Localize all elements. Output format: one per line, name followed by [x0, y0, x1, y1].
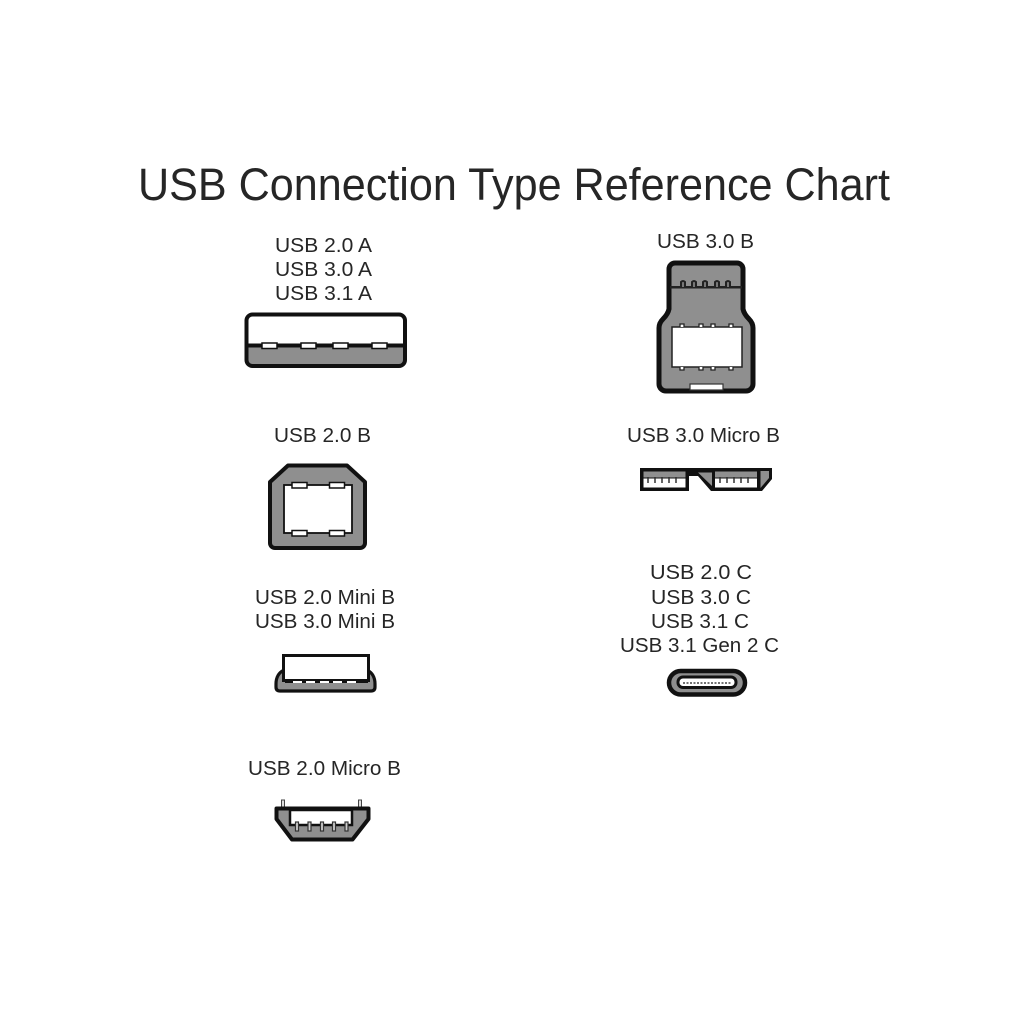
labels: USB Mini B [255, 586, 395, 633]
labels: USB C: USB 3.1 C [651, 610, 749, 633]
icon: USB Mini B connector [276, 656, 375, 691]
panel: USB C [620, 561, 779, 694]
icon: USB 3.0 Micro B connector [640, 468, 772, 491]
icon: USB C connector [669, 671, 745, 694]
labels: USB C: USB 3.1 Gen 2 C [620, 634, 779, 657]
icon: USB 2.0 Micro B connector [276, 800, 368, 840]
panel: USB Mini B [255, 586, 395, 691]
panel: USB 3.0 B [657, 230, 754, 391]
labels: USB C [620, 561, 779, 657]
icon: USB A connector [246, 314, 405, 366]
title: USB Connection Type Reference Chart [138, 159, 890, 210]
panel: USB 2.0 B [270, 424, 371, 548]
labels: USB C: USB 2.0 C [650, 561, 752, 584]
labels: USB Mini B: USB 3.0 Mini B [255, 610, 395, 633]
label: USB 3.0 B: USB 3.0 B [657, 230, 754, 253]
labels: USB A: USB 3.0 A [275, 258, 372, 281]
labels: USB Mini B: USB 2.0 Mini B [255, 586, 395, 609]
icon: USB 3.0 B connector [659, 263, 753, 391]
labels: USB C: USB 3.0 C [651, 586, 751, 609]
labels: USB A [275, 234, 372, 305]
label: USB 2.0 B: USB 2.0 B [274, 424, 371, 447]
label: USB 2.0 Micro B: USB 2.0 Micro B [248, 757, 401, 780]
panel: USB A [246, 234, 405, 366]
labels: USB A: USB 2.0 A [275, 234, 372, 257]
panel: USB 3.0 Micro B [627, 424, 780, 491]
panel: USB 2.0 Micro B [248, 757, 401, 840]
icon: USB 2.0 B connector [270, 466, 365, 548]
label: USB 3.0 Micro B: USB 3.0 Micro B [627, 424, 780, 447]
labels: USB A: USB 3.1 A [275, 282, 372, 305]
